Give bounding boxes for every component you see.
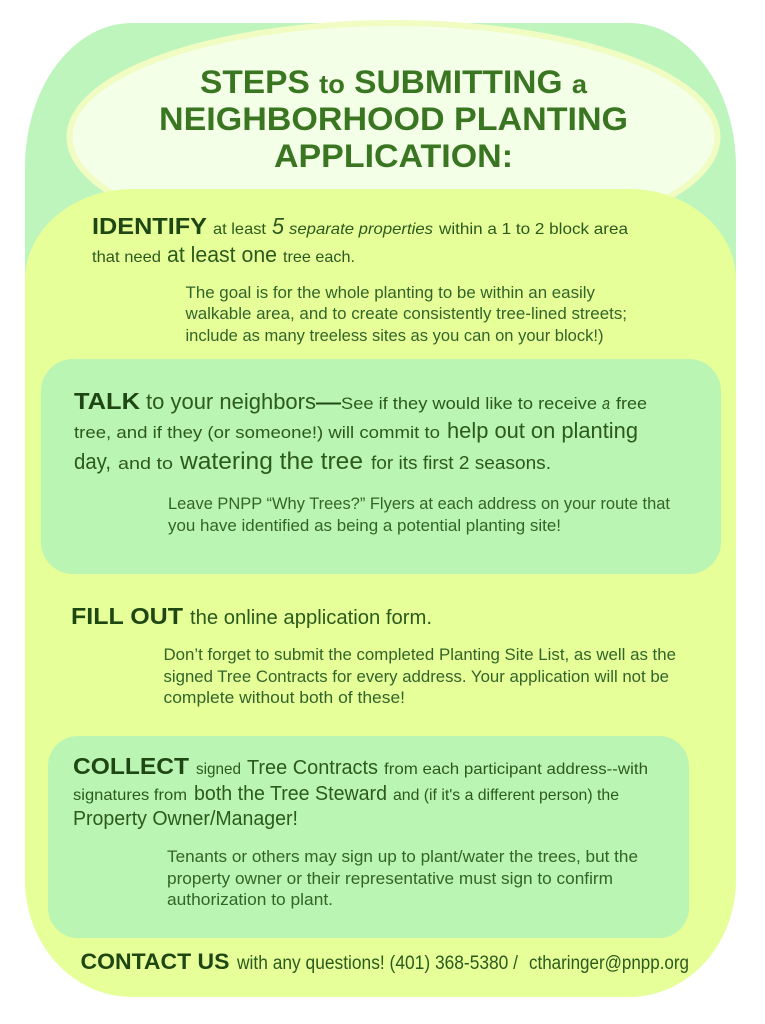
text block: collect step: Tree Contracts	[247, 757, 378, 779]
title: APPLICATION:	[274, 138, 513, 174]
text block: contact details: ctharinger@pnpp.org	[529, 953, 689, 974]
text block: identify note: include as many treeless sites as you can on your block!)	[186, 327, 604, 345]
text block: collect note: Tenants or others may sign up to plant/water the trees, but the	[167, 848, 638, 866]
text block: identify step: at least	[213, 221, 267, 238]
text block: talk step	[74, 388, 647, 475]
text block: identify step: that need	[92, 249, 161, 266]
text block: fill out step: FILL OUT	[71, 603, 183, 629]
text block: contact details	[80, 949, 689, 974]
text block: talk note	[168, 495, 670, 535]
text block: talk step: free	[616, 394, 647, 413]
text block: collect step: from each participant address--with	[384, 761, 648, 778]
text block: collect note	[167, 848, 638, 909]
panel: title ellipse	[70, 23, 718, 251]
text block: talk step: TALK	[74, 388, 140, 414]
text block: fill out note: complete without both of these!	[164, 689, 405, 707]
text block: identify note: walkable area, and to create consistently tree-lined streets;	[184, 305, 627, 323]
text block: talk note: you have identified as being a potential planting site!	[168, 517, 561, 535]
text block: identify step	[92, 213, 628, 267]
panel: green header backdrop	[25, 23, 736, 330]
text block: talk step: and to	[118, 454, 173, 473]
text block: collect step: Property Owner/Manager!	[73, 808, 298, 830]
text block: talk step: for its first 2 seasons.	[371, 453, 551, 473]
text block: identify step: tree each.	[283, 249, 355, 266]
text block: identify step: at least one	[167, 242, 277, 267]
text block: collect step: signed	[196, 761, 241, 778]
text block: talk step: —	[316, 392, 341, 414]
panel: yellow-green content area	[25, 189, 736, 997]
text block: collect step: signatures from	[73, 787, 187, 804]
text block: identify step: within a 1 to 2 block area	[438, 221, 628, 238]
text block: identify step: 5	[272, 213, 284, 239]
text block: talk step: tree, and if they (or someone!) will commit to	[74, 423, 440, 442]
text block: fill out step	[71, 603, 432, 629]
text block: collect step: both the Tree Steward	[194, 783, 387, 805]
text block: contact details: CONTACT US	[80, 949, 229, 974]
panel: collect step	[48, 736, 689, 938]
text block: talk step: to your neighbors	[146, 389, 316, 414]
text block: talk step: help out on planting	[447, 418, 638, 443]
text block: talk step: See if they would like to receive	[341, 394, 597, 413]
text block: collect step	[73, 753, 648, 830]
text block: identify step: separate properties	[289, 221, 433, 238]
text block: identify step: IDENTIFY	[92, 213, 207, 239]
text block: identify note: The goal is for the whole planting to be within an easily	[186, 284, 596, 302]
text block: collect step: and (if it's a different person) the	[393, 787, 619, 804]
text block: fill out note: signed Tree Contracts for every address. Your application will not be	[164, 668, 669, 686]
text block: talk step: day,	[74, 449, 111, 474]
text block: identify note	[184, 284, 627, 345]
title	[159, 64, 628, 174]
text block: contact details: with any questions! (401) 368-5380 /	[236, 953, 519, 974]
text block: fill out note	[164, 646, 676, 707]
title: NEIGHBORHOOD PLANTING	[159, 101, 628, 137]
text block: fill out step: the online application form.	[190, 607, 432, 629]
text block: talk step: watering the tree	[179, 448, 363, 475]
text block: collect note: property owner or their representative must sign to confirm	[167, 870, 613, 888]
text block: fill out note: Don’t forget to submit the completed Planting Site List, as well as the	[164, 646, 676, 664]
text block: talk note: Leave PNPP “Why Trees?” Flyers at each address on your route that	[168, 495, 670, 513]
panel: talk step	[41, 359, 721, 574]
text block: collect step: COLLECT	[73, 753, 189, 779]
text block: talk step: a	[602, 394, 610, 413]
text block: collect note: authorization to plant.	[167, 891, 333, 909]
title: STEPS to SUBMITTING a	[200, 64, 588, 100]
